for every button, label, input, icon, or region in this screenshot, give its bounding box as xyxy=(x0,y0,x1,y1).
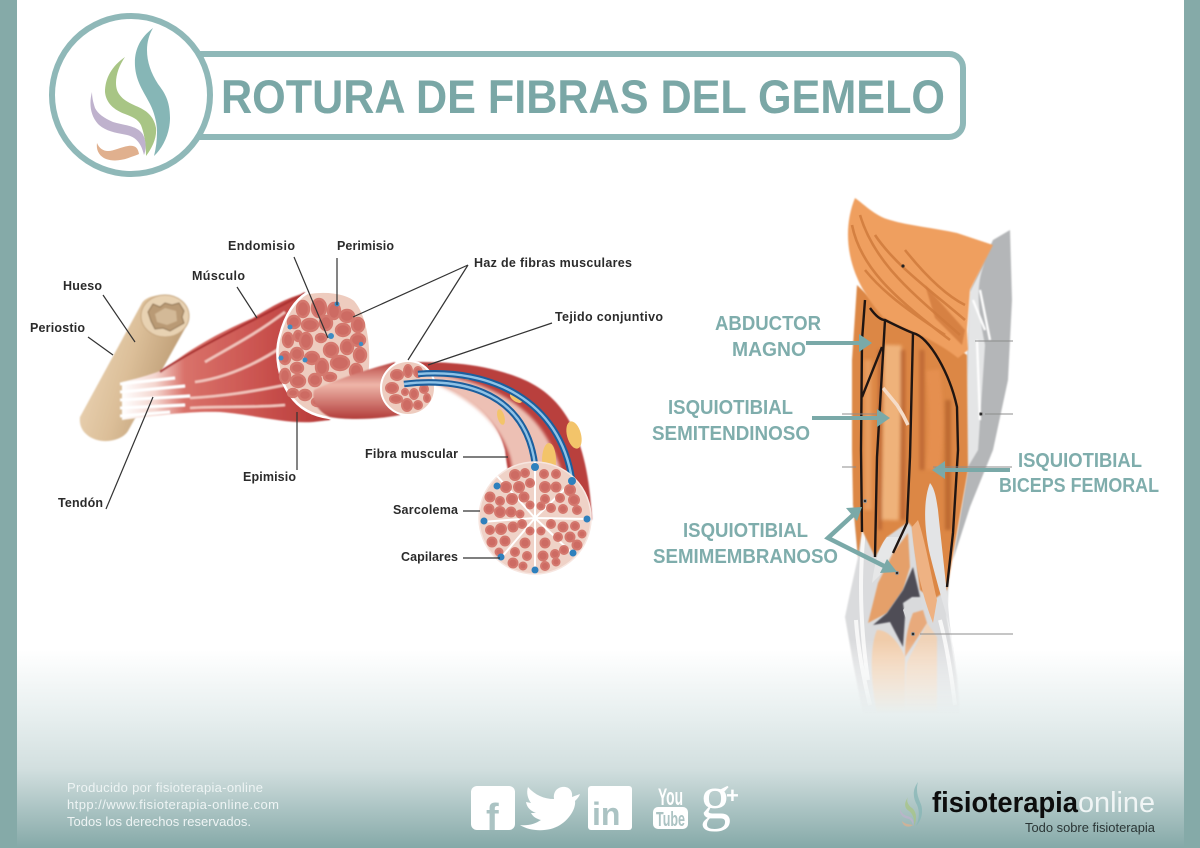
label: isquiotibial semitendinoso: SEMITENDINOSO xyxy=(652,423,810,445)
title frame xyxy=(150,54,963,137)
title text: ROTURA DE FIBRAS DEL GEMELO xyxy=(221,70,945,123)
large fascicle cross-section xyxy=(277,292,370,418)
label: Hueso: Hueso xyxy=(63,279,102,293)
label: Epimisio: Epimisio xyxy=(243,470,296,484)
label: isquiotibial semitendinoso: ISQUIOTIBIAL xyxy=(668,397,793,419)
icon: linkedin xyxy=(588,786,632,832)
semimembranoso head xyxy=(868,533,910,623)
biceps tendon xyxy=(925,483,954,656)
icon: youtube: Tube xyxy=(656,809,685,831)
guide lines and dots xyxy=(842,341,1013,636)
muscle belly with tendon xyxy=(120,292,330,422)
footer brand logo xyxy=(900,782,1156,835)
label: Endomisio: Endomisio xyxy=(228,239,295,253)
bone xyxy=(80,295,189,441)
lateral muscle band xyxy=(912,520,937,623)
arrow: semitendinoso xyxy=(812,409,890,427)
leg muscle illustration xyxy=(842,198,1013,714)
icon: google plus: g xyxy=(700,764,731,832)
fibre cross-section xyxy=(479,462,591,574)
small fascicle cross-section xyxy=(381,361,435,415)
title banner xyxy=(52,16,963,174)
label: Tendón: Tendón xyxy=(58,496,103,510)
label: abductor magno: MAGNO xyxy=(732,339,806,361)
gluteal muscle xyxy=(848,198,993,358)
logo wordmark: fisioterapia xyxy=(932,787,1079,819)
footer credits: Producido por fisioterapia-online xyxy=(67,780,263,795)
icon: youtube xyxy=(653,784,688,831)
footer credits: Todos los derechos reservados. xyxy=(67,814,251,829)
lower silhouette and tendons xyxy=(844,504,958,690)
label: abductor magno xyxy=(715,313,822,361)
long muscle fibre xyxy=(412,362,592,520)
dark popliteal hollow xyxy=(873,567,920,647)
icon: facebook: f xyxy=(486,797,499,839)
logo wordmark xyxy=(932,787,1155,819)
label: Tejido conjuntivo: Tejido conjuntivo xyxy=(555,310,663,324)
arrows xyxy=(806,334,1010,573)
label: Músculo: Músculo xyxy=(192,269,245,283)
social icons xyxy=(471,764,739,839)
label: isquiotibial semimembranoso: ISQUIOTIBIAL xyxy=(683,520,808,542)
highlights xyxy=(868,345,948,530)
icon: facebook xyxy=(471,786,515,839)
middle fascicle tube xyxy=(313,362,400,419)
central white tendon xyxy=(872,537,900,583)
black separation lines xyxy=(861,300,958,587)
label: abductor magno: ABDUCTOR xyxy=(715,313,822,335)
muscle labels xyxy=(652,313,1159,568)
fibre tear xyxy=(883,388,908,425)
logo flames xyxy=(90,28,170,160)
icon: google plus: + xyxy=(726,783,739,808)
label: Periostio: Periostio xyxy=(30,321,85,335)
icon: youtube: You xyxy=(658,784,683,811)
leader lines xyxy=(88,257,552,558)
arrow: abductor magno xyxy=(806,334,872,352)
logo flame mark xyxy=(900,782,922,827)
label: Haz de fibras musculares: Haz de fibras musculares xyxy=(474,256,632,270)
label: Fibra muscular: Fibra muscular xyxy=(365,447,458,461)
grey fascia xyxy=(953,230,1012,560)
label: Sarcolema: Sarcolema xyxy=(393,503,459,517)
logo wordmark: online xyxy=(1078,787,1155,819)
hamstring muscles xyxy=(852,285,968,600)
calf muscles xyxy=(872,610,937,714)
label: isquiotibial semimembranoso: SEMIMEMBRANOSO xyxy=(653,546,838,568)
footer gradient band xyxy=(0,650,1200,848)
arrow: semimembranoso xyxy=(828,507,897,573)
label: Capilares: Capilares xyxy=(401,550,458,564)
capillary tubes xyxy=(404,373,572,480)
right side bar xyxy=(1184,0,1200,848)
label: isquiotibial biceps femoral: ISQUIOTIBIAL xyxy=(1018,450,1142,472)
icon: linkedin: in xyxy=(592,796,620,832)
label: isquiotibial biceps femoral xyxy=(999,450,1159,497)
footer credits xyxy=(67,780,279,829)
logo tagline: Todo sobre fisioterapia xyxy=(1025,820,1156,835)
label: Perimisio: Perimisio xyxy=(337,239,394,253)
footer credits: htpp://www.fisioterapia-online.com xyxy=(67,797,279,812)
arrow: biceps femoral xyxy=(932,461,1010,479)
label: isquiotibial semitendinoso xyxy=(652,397,810,445)
icon: twitter xyxy=(520,787,580,830)
left side bar xyxy=(0,0,17,848)
muscle anatomy diagram xyxy=(30,239,663,574)
lateral tendon streaks xyxy=(854,532,955,693)
label: isquiotibial biceps femoral: BICEPS FEMORAL xyxy=(999,475,1159,497)
logo circle xyxy=(52,16,210,174)
white patch xyxy=(903,598,912,618)
label: isquiotibial semimembranoso xyxy=(653,520,838,568)
